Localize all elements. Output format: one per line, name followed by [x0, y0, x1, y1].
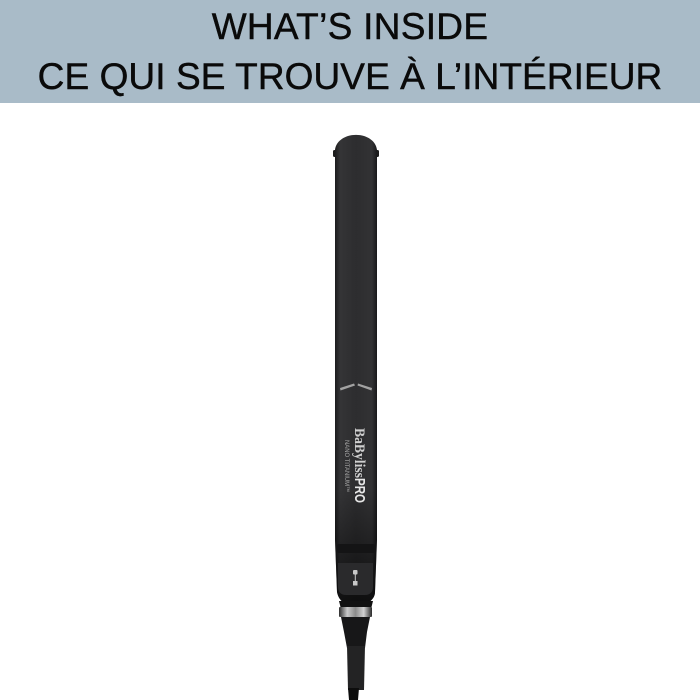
cord — [347, 646, 365, 690]
title: French: CE QUI SE TROUVE À L’INTÉRIEUR — [38, 56, 662, 97]
strain relief — [341, 617, 370, 648]
chevron markers — [340, 384, 372, 390]
collar — [339, 601, 373, 609]
iron body — [335, 135, 377, 603]
brand text: BaByliss — [351, 428, 367, 478]
switch icon — [353, 570, 358, 586]
switch panel — [338, 563, 373, 595]
brand text: PRO — [351, 478, 368, 503]
lower body shading — [335, 490, 377, 603]
plate ridge — [337, 544, 375, 553]
brand text — [343, 428, 368, 503]
header band — [0, 0, 700, 103]
hinge tabs — [333, 150, 379, 157]
title: English: WHAT’S INSIDE — [212, 6, 488, 47]
brand text: NANO TITANIUM™ — [343, 440, 350, 492]
metal ring — [339, 607, 372, 617]
